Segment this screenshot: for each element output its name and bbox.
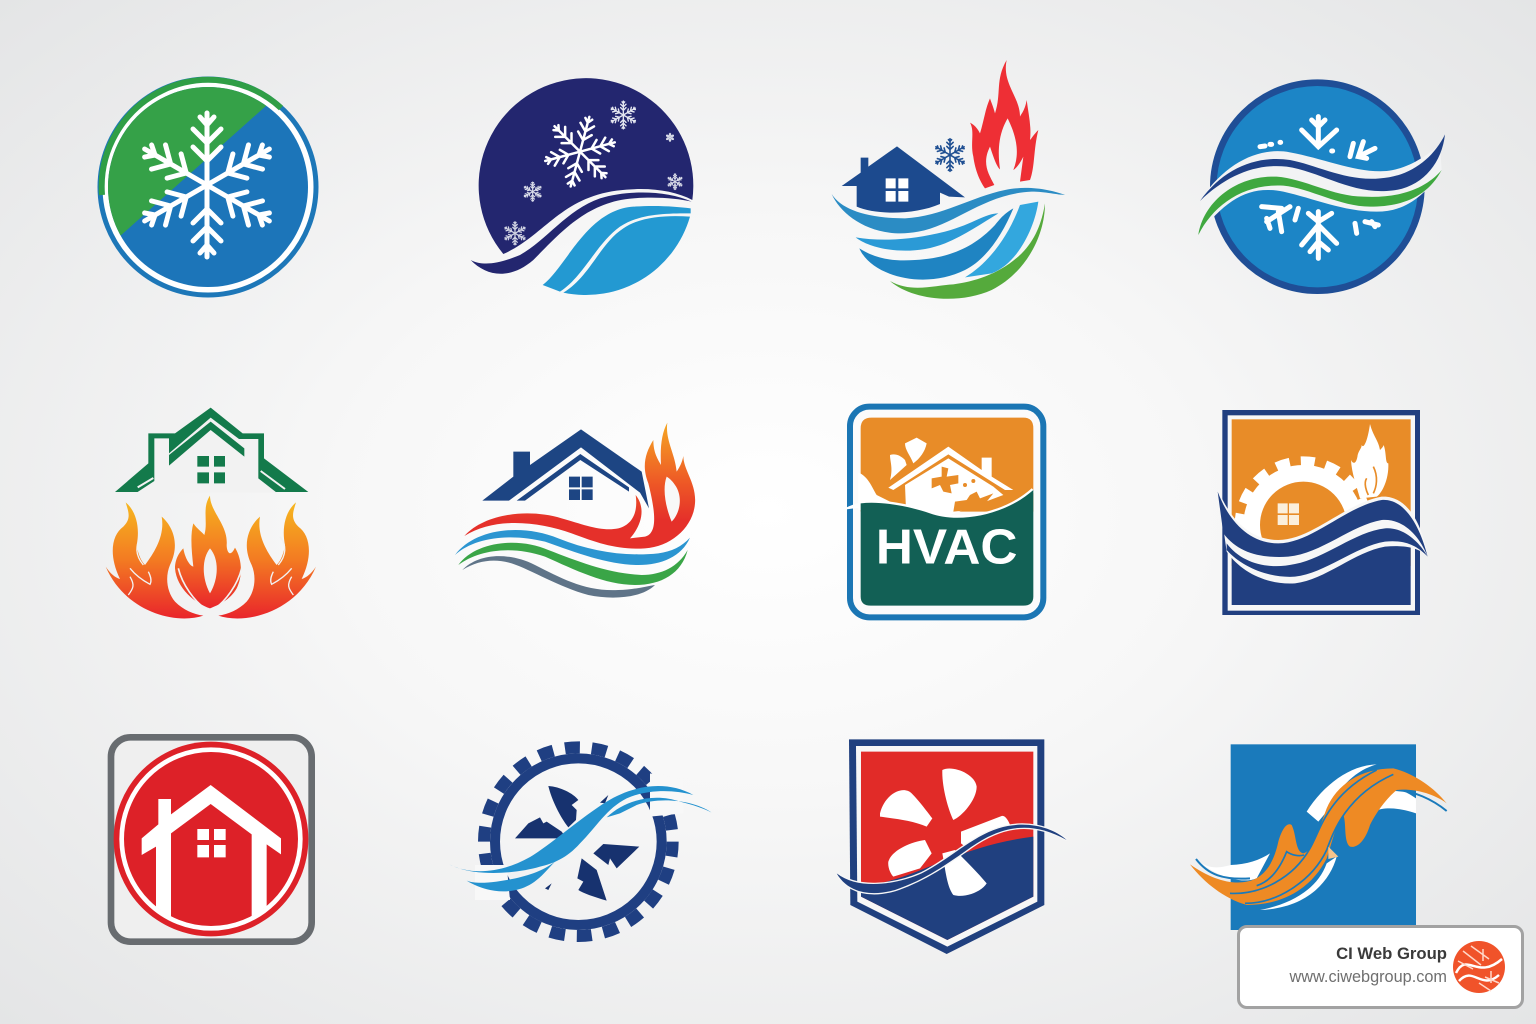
icon: top snowflake fragment: [1260, 117, 1375, 158]
wave bands: [1198, 145, 1442, 235]
icon: flame: [1351, 424, 1388, 498]
icon: gear and dome: [1252, 473, 1355, 577]
wave: [449, 786, 693, 873]
icon: bottom snowflake fragment: [1262, 207, 1378, 258]
icon: flame: [970, 60, 1038, 188]
logo: snowflake circle: [100, 79, 316, 296]
icon: green house: [115, 408, 308, 492]
card: CI Web Group badge: [1237, 925, 1524, 1009]
icon: snowflake: [138, 113, 276, 257]
logo: gear and fan: [449, 747, 712, 936]
logo: shield with fan: [837, 739, 1067, 954]
icon: flame: [464, 423, 695, 549]
icon: house: [142, 785, 281, 916]
logo: house, flame and waves: [832, 60, 1065, 299]
icon: house with fan: [888, 438, 1013, 515]
logo: blue circle with green wave: [1198, 83, 1445, 291]
logo: red circle house: [111, 737, 312, 942]
icon: fan: [880, 769, 1012, 896]
icon: gear: [495, 758, 662, 925]
icon: large snowflake: [537, 108, 623, 195]
icon: house: [842, 146, 965, 213]
blue water: [543, 206, 691, 292]
waves: [455, 530, 690, 565]
icon: flames: [106, 496, 316, 618]
logo: gear square: [1218, 410, 1428, 615]
icon: small snowflake: [934, 139, 966, 171]
logo: HVAC badge: [842, 407, 1043, 617]
icon: fan: [515, 786, 639, 901]
logo: navy house, flame and colored waves: [455, 423, 695, 598]
logo: navy circle with snowflakes and wave: [471, 78, 693, 295]
waves: [890, 203, 1045, 299]
navy base and waves: [1232, 527, 1411, 605]
website url: www.ciwebgroup.com: [1290, 968, 1447, 986]
logo: green house over flames: [106, 408, 316, 618]
orange ribbons: [1190, 768, 1447, 905]
icon: company globe logo: [1453, 941, 1505, 993]
wave: [837, 825, 1067, 893]
heading: HVAC: HVAC: [876, 519, 1017, 574]
wave swoosh: [471, 192, 692, 274]
company name: CI Web Group: [1336, 944, 1447, 963]
logo: blue square with orange wave: [1190, 744, 1447, 930]
icon: house: [482, 429, 649, 508]
